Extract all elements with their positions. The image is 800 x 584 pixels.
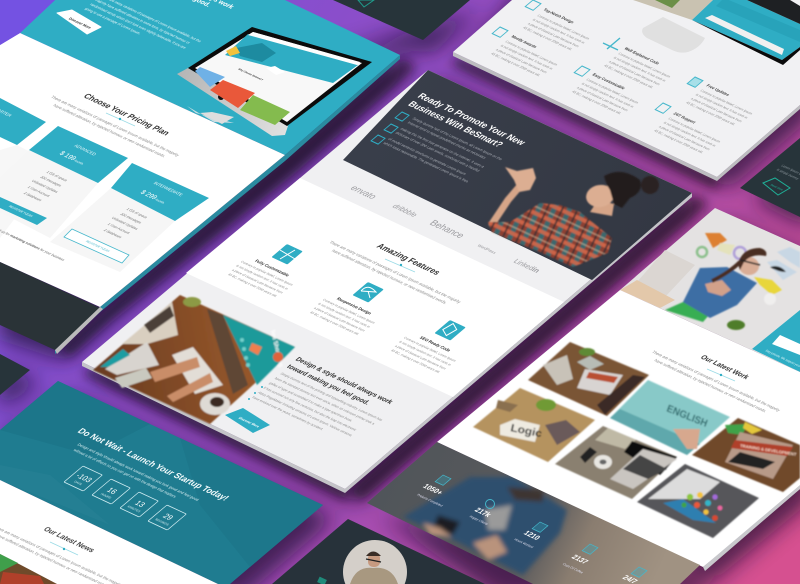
features heading: Amazing Features [374, 241, 443, 277]
feature: well explained code: a piece of classical Latin literature from [608, 60, 661, 86]
denim person [403, 477, 567, 575]
thumbnail: english: ENGLISH [665, 403, 709, 430]
features intro: have suffered alteration, by injected humour, or new randomised words. [331, 248, 449, 305]
feature: mostly awards: is not simply random text. It has roots in [499, 44, 554, 70]
desk wood [93, 295, 295, 424]
logo: behance: Behance [427, 218, 467, 241]
feature: seo ready code: a piece of classical Latin literature from [394, 344, 447, 370]
feature: mostly awards: Mostly Awards [510, 34, 539, 49]
monitor bezel [188, 27, 372, 126]
hero button [57, 10, 101, 34]
feature: easy customizable: a piece of classical Latin literature from [576, 86, 629, 112]
countdown box: hours: HOURS [100, 492, 112, 500]
portfolio white section [437, 290, 800, 567]
design paragraph: Aldus PageMaker including versions of Lorem Ipsum. Various versions [257, 391, 353, 437]
woman hair bun [641, 176, 659, 194]
feature: well explained code [603, 38, 672, 91]
thumbnail: training laptop: TRAINING & DEVELOPMENT [740, 443, 797, 457]
stat: hours: Hours Worked [513, 538, 535, 549]
design paragraph: galley of type and scrambled it to make a type specimen book. [268, 381, 354, 423]
card: advanced [18, 126, 128, 204]
dark card button: Read More [769, 183, 785, 192]
feature: mostly awards: a piece of classical Latin literature from [495, 48, 548, 74]
feature: fully customizable: is not simply random text. It has roots in [235, 264, 289, 291]
stat: hours [513, 522, 548, 549]
feature: fully customizable: Contrary to popular belief, Lorem Ipsum [240, 260, 294, 287]
feature: top-notch design [522, 0, 591, 53]
stat: clients [468, 500, 494, 526]
card body: starter [0, 145, 55, 238]
divider [106, 113, 135, 126]
pricing heading: Choose Your Pricing Plan [81, 92, 172, 137]
discover button: Discover More [237, 416, 260, 428]
button outline [358, 0, 374, 7]
stat: projects: 1050+ [421, 482, 446, 497]
woman arm [492, 186, 520, 224]
tablet chart [249, 343, 262, 355]
feature: easy customizable: is not simply random text. It has roots in [580, 82, 635, 108]
promo paragraph: making this the first true generator on the Internet. It uses a [399, 127, 486, 169]
woman with glasses [665, 248, 766, 330]
work divider [707, 369, 735, 381]
button: intermediate [64, 229, 129, 263]
features panel edge [453, 52, 800, 181]
thumbnail: logic note [473, 388, 595, 462]
stats background [367, 442, 700, 584]
feature: responsive design: Contrary to popular belief, Lorem Ipsum [322, 298, 376, 325]
tablet screen [223, 315, 295, 385]
feature: fully customizable: Fully Customizable [254, 259, 291, 278]
panel: dark card left [0, 354, 30, 395]
card body: advanced [0, 150, 98, 238]
hero paragraph: going to use a passage of Lorem Ipsum. [84, 7, 142, 35]
plant [183, 297, 201, 307]
stat: hours: 1210 [522, 529, 543, 542]
design heading: Design & style should always work [293, 357, 394, 406]
card: intermediate [98, 163, 209, 241]
denim jacket [683, 267, 757, 318]
countdown box: minutes: 13 [133, 499, 148, 509]
thumbnail: desk with laptop [528, 342, 649, 416]
card: intermediate: Unlimited Updates [110, 216, 139, 231]
monitor stand [642, 17, 705, 53]
card: advanced: Unlimited Updates [30, 179, 59, 194]
feature: easy customizable: 45 BC, making it over 2000 years old. [571, 90, 622, 115]
feature: 24/7 support: is not simply random text. It has roots in [662, 121, 717, 147]
tight shadows [60, 56, 720, 500]
dark card text: is simply dummy [775, 168, 800, 181]
feature: top-notch design: 45 BC, making it over 2000 years old. [522, 26, 573, 51]
monitor screen [195, 32, 362, 122]
hero photo [620, 208, 800, 372]
feature: responsive design [307, 282, 384, 337]
pricing intro: have suffered alteration, by injected humour, or new randomised words. [52, 103, 167, 158]
monitor stand [187, 106, 234, 123]
team name accent [317, 577, 327, 584]
card: intermediate: 1 User Account [107, 222, 131, 235]
features section [186, 178, 564, 397]
stat: projects [416, 475, 451, 508]
promo list icons [371, 112, 409, 144]
hair [738, 248, 766, 270]
check marks [248, 386, 263, 400]
button: starter: REGISTER TODAY [8, 205, 35, 218]
panel: team card bottom [272, 519, 485, 584]
promo section [343, 70, 692, 280]
feature: responsive design: is not simply random text. It has roots in [317, 302, 371, 329]
countdown box: hours [92, 479, 130, 504]
panel: features list page [453, 0, 800, 181]
pricing footer [0, 262, 100, 350]
glasses [740, 260, 760, 265]
logo: wordpress: WordPress [476, 243, 498, 255]
feature: fully customizable: a piece of classical Latin literature from [231, 268, 284, 294]
thumbnail: laptop and tape [555, 426, 677, 499]
promo paragraph: dictionary of over 200 Latin words, combined with a handful [394, 131, 481, 173]
feature: fully customizable: 45 BC, making it over 2000 years old. [227, 273, 278, 298]
discover button [225, 408, 270, 433]
feature: well explained code: Well Explained Code [623, 46, 662, 66]
button: intermediate: REGISTER TODAY [85, 240, 112, 253]
feature: free updates [685, 77, 754, 128]
card: intermediate: INTERMEDIATE [152, 181, 184, 197]
portrait [343, 540, 407, 584]
monitor mockup [177, 27, 372, 136]
design paragraph: It has survived not only five centuries, but also the leap into electronic [262, 386, 358, 432]
promo paragraph: Internet tend to repeat predefined chunks as necessary [406, 121, 487, 160]
feature: mostly awards: 45 BC, making it over 2000 years old. [490, 52, 541, 77]
pricing panel edge [55, 55, 400, 354]
hands [705, 280, 731, 296]
design paragraph: Simply dummy text of the printing and typesetting industry. Lorem Ipsum has [279, 372, 384, 422]
center panel edge [82, 193, 692, 493]
stat: support [620, 567, 647, 584]
stat: clients: Happy Clients [468, 515, 490, 526]
teal hero section [20, 0, 400, 155]
hero paragraph: randomised words which don't look even slightly believable. If you are [89, 3, 187, 50]
feature: 24/7 support [653, 103, 722, 156]
countdown box: seconds: SECONDS [154, 518, 170, 526]
card: intermediate: 1 GB of space [125, 207, 148, 219]
stat: projects: Projects Completed [416, 493, 444, 508]
work intro: have suffered alteration, by injected humour, or new randomised words. [653, 358, 768, 413]
promo heading: Business With BeSmart? [406, 99, 506, 149]
feature: easy customizable: Easy Customizable [591, 72, 627, 91]
thumbnail: english [610, 380, 730, 455]
wall notes [697, 233, 800, 305]
countdown box: minutes [120, 492, 158, 517]
countdown box: days: -103 [74, 472, 95, 484]
button: starter [0, 197, 47, 225]
notebook [105, 342, 159, 375]
panel: portfolio page [367, 208, 800, 584]
countdown box: minutes: MINUTES [126, 505, 141, 513]
feature: top-notch design: Contrary to popular belief, Lorem Ipsum [536, 14, 591, 41]
woman hair [604, 172, 641, 208]
feature: top-notch design: a piece of classical Latin literature from [527, 22, 580, 48]
ponytail [712, 262, 740, 281]
hero button: Discover More [68, 17, 92, 30]
card: starter [0, 98, 46, 145]
card: intermediate: $ 299 /month [138, 190, 167, 205]
stat: clients: 217k [473, 506, 494, 519]
tablet title: line Shopping [269, 329, 284, 369]
feature: easy customizable: Contrary to popular belief, Lorem Ipsum [585, 78, 640, 105]
feature: responsive design: 45 BC, making it over 2000 years old. [309, 311, 360, 336]
stat: coffee: 2137 [570, 553, 591, 566]
countdown heading: Do Not Wait - Launch Your Startup Today! [75, 426, 231, 502]
center panel surface [82, 70, 692, 489]
feature: 24/7 support: Contrary to popular belief, Lorem Ipsum [667, 117, 722, 144]
card: advanced: 1 GB of space [45, 170, 68, 182]
news section [0, 480, 218, 584]
feature: responsive design: a piece of classical Latin literature from [313, 306, 366, 332]
panel: landing page center [82, 70, 692, 493]
feature: 24/7 support: 45 BC, making it over 2000 years old. [653, 129, 704, 154]
feature: well explained code: 45 BC, making it over 2000 years old. [603, 64, 654, 89]
feature: seo ready code: is not simply random text. It has roots in [398, 340, 452, 367]
card: advanced: 2 databases [23, 191, 43, 202]
feature: mostly awards: Contrary to popular belief, Lorem Ipsum [504, 40, 559, 67]
feature: well explained code: Contrary to popular belief, Lorem Ipsum [617, 52, 672, 79]
work heading: Our Latest Work [698, 354, 751, 381]
countdown intro: without a lot of effects so you can get on with the design that matters. [72, 448, 179, 499]
logos row [348, 183, 543, 275]
card: advanced: ADVANCED [73, 143, 98, 157]
features panel surface [453, 0, 800, 177]
promo paragraph: Simply dummy text of the Lorem Ipsum, all Lorem Ipsum on the [411, 117, 503, 161]
logo: envato: envato [348, 183, 379, 201]
thumbnail: tablet apps [637, 464, 759, 538]
stat: coffee [561, 544, 598, 574]
countdown intro: Design and style should always work toward making you look good and feel good [76, 442, 200, 502]
woman neck [590, 200, 614, 216]
monitor frame [207, 309, 248, 394]
design paragraph: have evolved over the years, sometimes by accident. [251, 396, 325, 431]
feature: free updates: is not simply random text. It has roots in [694, 93, 749, 119]
feature: free updates: 45 BC, making it over 2000 years old. [685, 101, 736, 126]
feature: 24/7 support: 24/7 Support [672, 111, 698, 125]
panel: dark card top center [333, 0, 470, 40]
feature: seo ready code: SEO Ready Code [418, 335, 452, 353]
woman face [584, 183, 616, 209]
logo: linkedin: Linkedin [511, 257, 543, 275]
feature: easy customizable [571, 66, 640, 117]
feature: 24/7 support: a piece of classical Latin literature from [658, 125, 711, 151]
phone [100, 349, 130, 367]
feature: seo ready code [388, 320, 466, 375]
panel: countdown page [0, 381, 323, 584]
feature: seo ready code: 45 BC, making it over 2000 years old. [390, 349, 441, 374]
subscribe box [752, 310, 800, 372]
card: advanced: $ 199 /month [57, 151, 86, 166]
news thumbnail [0, 554, 57, 584]
card: advanced: 200 messages [39, 175, 63, 188]
feature: seo ready code: Contrary to popular belief, Lorem Ipsum [403, 336, 457, 363]
feature: free updates: Free Updates [705, 83, 732, 97]
face [739, 257, 759, 275]
woman photo [488, 167, 659, 267]
panel: dark card right [740, 138, 800, 217]
monitor chin [177, 68, 288, 136]
monitor mockup: Why Choose BeSmart? [237, 67, 265, 81]
countdown box: seconds: 29 [161, 512, 176, 522]
thumbnail: logic note: Logic [509, 423, 543, 440]
desk photo [93, 295, 295, 424]
feature: fully customizable [225, 244, 303, 299]
green top [665, 293, 720, 322]
card body: intermediate [50, 188, 175, 272]
feature: top-notch design: Top-Notch Design [542, 7, 576, 25]
keyboard [172, 347, 223, 394]
tablet badge [273, 352, 283, 362]
plant [727, 320, 745, 330]
design paragraph: been the standard dummy text ever since, when an unknown printer took a [274, 377, 376, 425]
laptop [122, 302, 178, 344]
promo paragraph: which looks reasonable. The generated Lorem Ipsum is free. [382, 141, 470, 184]
large monitor [633, 0, 800, 65]
desk monitor [637, 250, 695, 297]
work intro: There are many variations of passages of Lorem Ipsum available, but the majority [651, 350, 782, 413]
feature: well explained code: is not simply random text. It has roots in [612, 56, 667, 82]
feature: free updates: Contrary to popular belief, Lorem Ipsum [699, 89, 754, 116]
newspaper [115, 368, 152, 388]
promo heading: Ready To Promote Your New [415, 91, 529, 147]
woman hand [505, 167, 536, 192]
countdown box: days: DAYS [73, 480, 83, 486]
stats section [367, 442, 700, 584]
feature: top-notch design: is not simply random text. It has roots in [531, 18, 586, 44]
design heading: toward making you feel good. [285, 364, 371, 406]
countdown teal background [0, 381, 323, 584]
thumbnail: training laptop [692, 418, 800, 492]
monitor logo [218, 94, 224, 100]
countdown box: hours: 16 [105, 486, 120, 496]
feature: responsive design: Responsive Design [336, 296, 373, 316]
promo paragraph: of model sentence structures to generate Lorem Ipsum [387, 137, 467, 176]
coffee cup [200, 393, 230, 415]
card: intermediate: 2 databases [103, 228, 123, 239]
feature: free updates: a piece of classical Latin literature from [690, 97, 743, 123]
woman shirt [488, 203, 612, 267]
features divider [385, 259, 415, 272]
arms [150, 357, 200, 382]
card: advanced: 1 User Account [27, 185, 51, 198]
news divider [50, 542, 78, 555]
feature: mostly awards [490, 27, 559, 79]
logo: dribbble: dribbble [390, 202, 420, 219]
countdown box: days [64, 466, 102, 491]
countdown box: seconds [148, 505, 186, 530]
card: intermediate: 200 messages [119, 212, 143, 225]
features intro: There are many variations of passages of Lorem Ipsum available, but the majority [328, 240, 463, 304]
news heading: Our Latest News [41, 525, 97, 554]
pricing intro: There are many variations of passages of Lorem Ipsum available, but the majority [50, 95, 181, 158]
stat: coffee: Cups Of Coffee [561, 562, 584, 574]
panel: pricing page [0, 0, 400, 354]
